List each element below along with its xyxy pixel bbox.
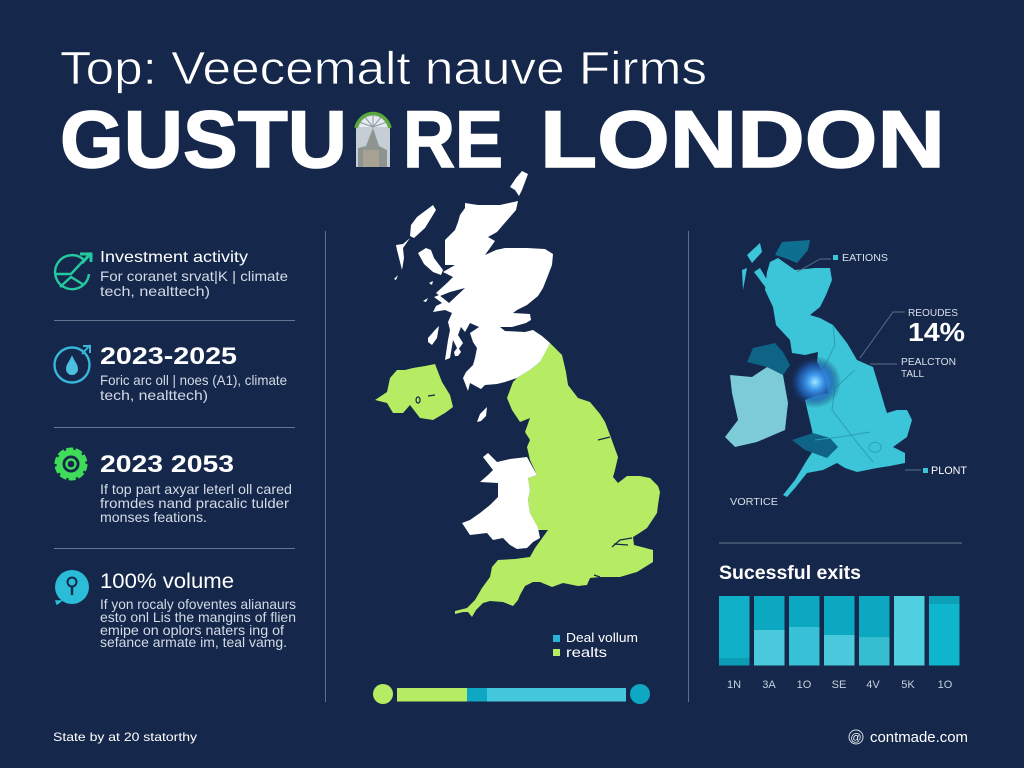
footer website: contmade.com [870,729,968,746]
bar chart: successful exits [719,596,960,691]
stat block: 2023 2053: fromdes nand pracalic tulder [100,495,289,511]
map region: northern Scotland [775,240,810,263]
map callouts: TALL [901,368,924,380]
map region: Wales [462,453,540,549]
progress bar [373,684,650,704]
map callouts: REOUDES [908,307,958,319]
legend: deal volume and results: realts [566,644,607,660]
bar labels: 3A [762,679,776,691]
stat block: 2023-2025: Foric arc oll | noes (A1), climate [100,372,287,388]
map region: Ireland [725,367,788,447]
map callouts: EATIONS [842,252,888,264]
location glow [789,356,841,408]
title: Top: Veecemalt nauve Firms [60,42,707,94]
title: LONDON [540,95,945,185]
heading: successful exits: Sucessful exits [719,563,861,584]
title: RE [403,95,503,185]
bar labels: 5K [901,679,915,691]
legend: deal volume and results: Deal vollum [566,630,638,645]
map region: Great Britain [765,258,912,497]
stat block: 2023 2053: If top part axyar leterl oll cared [100,481,292,497]
bar labels: 4V [866,679,880,691]
icon: growth chart circle [55,253,91,289]
stat block: 100% volume: If yon rocaly ofoventes alianaurs [100,596,296,612]
footer website: @ [850,732,862,744]
small regional map [725,240,912,497]
footer note: State by at 20 statorthy [53,730,197,744]
stat block: investment activity [55,249,288,299]
stat block: 100% volume: emipe on oplors naters ing of [100,622,284,638]
panel: left stats column [54,249,296,650]
icon: clock tower in arch [356,112,390,167]
map region: England [455,343,660,617]
bar labels [727,679,953,691]
bar labels: 1N [727,679,741,691]
icon: green gear [56,449,86,479]
stat block: 2023-2025: 2023-2025 [100,343,237,370]
stat block: 2023 2053 [56,449,292,525]
icon: water drop circle [54,345,90,382]
map region: Northern Ireland dark [747,343,790,375]
map callouts: VORTICE [730,496,778,508]
icon: pin badge [55,570,89,604]
map region: Scotland [394,171,553,391]
title [60,42,945,185]
stat block: investment activity: For coranet srvat|K | climate [100,268,288,284]
stat block: 100% volume: 100% volume [100,570,234,593]
stat block: 100% volume [55,570,296,650]
title: GUSTU [60,95,347,185]
stat block: 100% volume: sefance armate im, teal vamg. [100,634,287,650]
stat block: 2023-2025: tech, nealttech) [100,387,208,403]
stat block: investment activity: Investment activity [100,249,248,266]
map callouts: 14% [908,317,965,347]
map callouts: PLONT [931,465,967,477]
stat block: investment activity: tech, nealttech) [100,283,210,299]
stat block: 2023 2053: 2023 2053 [100,451,234,478]
map callouts [730,252,967,508]
main UK map [375,171,660,617]
map callouts: PEALCTON [901,356,956,368]
bar labels: 1O [938,679,953,691]
water details [416,395,632,577]
map region: Hebrides and Skye [742,243,770,290]
legend: deal volume and results [553,630,638,660]
stat block: 100% volume: esto onl Lis the mangins of flien [100,609,296,625]
region borders [815,325,881,462]
stat block: 2023-2025 [54,343,287,403]
bar labels: 1O [797,679,812,691]
map region: Isle of Man [477,407,487,422]
map region: Wales dark [792,433,838,458]
vertical dividers [326,231,688,702]
bar labels: SE [832,679,846,691]
stat block: 2023 2053: monses feations. [100,509,207,525]
map region: Northern Ireland [375,364,453,420]
